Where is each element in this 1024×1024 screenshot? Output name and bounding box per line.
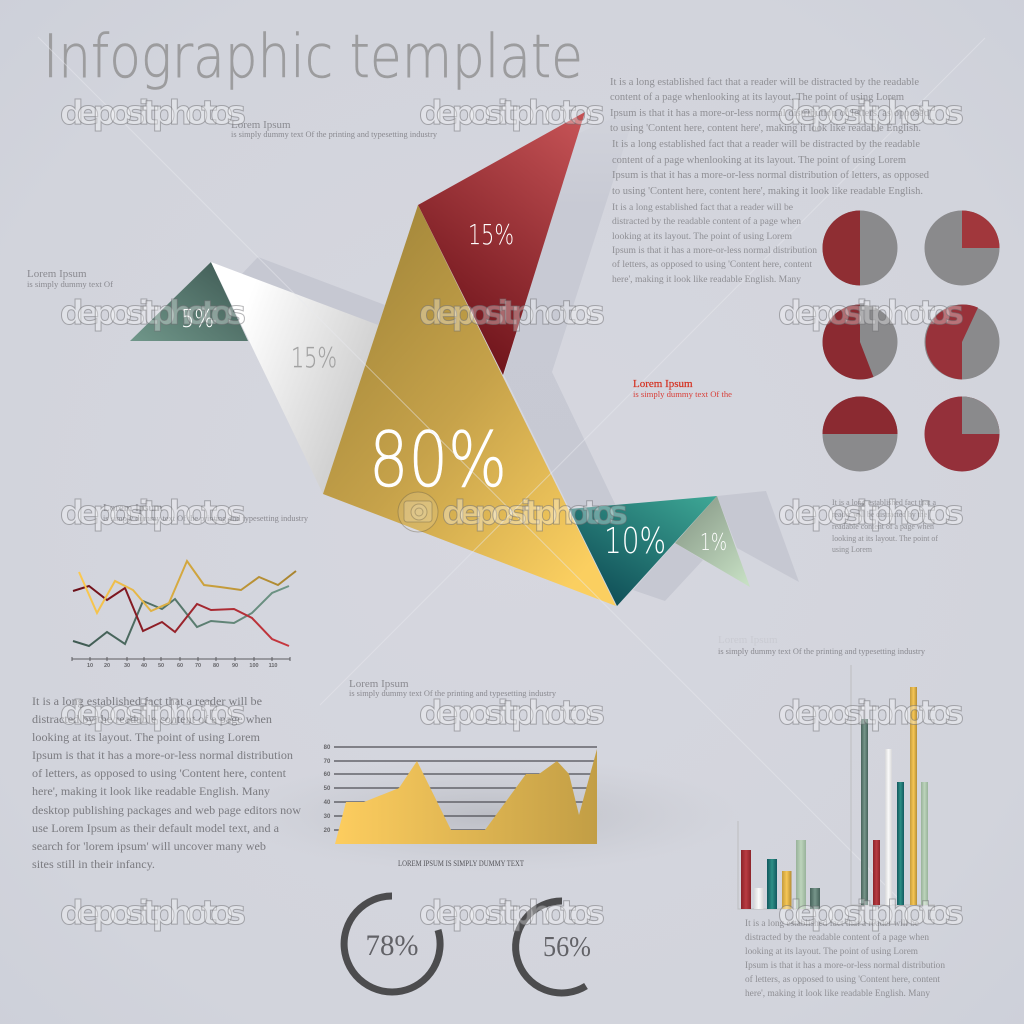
caption: line chart: [103, 502, 309, 523]
pie 6: [924, 396, 1000, 472]
text block: top right paragraphs: It is a long established fact that a reader will be distracted by the readable: [610, 77, 919, 88]
value: 5%: 5%: [181, 304, 214, 333]
caption: top centre: Lorem Ipsum: [231, 119, 291, 131]
axis: 80: [213, 663, 219, 669]
value: 80%: 80%: [369, 415, 507, 504]
axis: 60: [177, 663, 183, 669]
text block: lower right: of letters, as opposed to using 'Content here, content: [745, 974, 940, 985]
axis: 90: [232, 663, 238, 669]
text block: right of teal segment: looking at its layout. The point of: [832, 533, 938, 543]
watermarks: depositphotos: [778, 893, 964, 932]
watermarks: depositphotos: [419, 93, 605, 132]
caption: line chart: Lorem Ipsum: [103, 502, 163, 514]
caption: bar charts: Lorem Ipsum: [718, 634, 778, 646]
bar: light green: [796, 840, 806, 909]
text block: beside pies: It is a long established fact that a reader will be: [612, 202, 793, 213]
pie 1: [822, 210, 898, 286]
text block: right of teal segment: reader will be distracted by the: [832, 509, 927, 519]
caption: left: [27, 268, 113, 289]
caption: red: [633, 378, 732, 399]
caption: left: is simply dummy text Of: [27, 280, 113, 289]
bar: white: [754, 888, 764, 909]
text block: lower left: Ipsum is that it has a more-or-less normal distribution: [32, 750, 293, 762]
grid lines and scale: 70: [324, 759, 331, 765]
icon: watermark camera: [398, 492, 438, 532]
axis: 30: [124, 663, 130, 669]
axis: 100: [249, 663, 259, 669]
bar: red: [741, 850, 751, 909]
segment: dark green 5%: [130, 262, 248, 341]
chart caption: LOREM IPSUM IS SIMPLY DUMMY TEXT: [398, 858, 525, 868]
watermarks: depositphotos: [60, 693, 246, 732]
axis: 40: [141, 663, 147, 669]
watermarks: depositphotos: [778, 493, 964, 532]
axis: 70: [195, 663, 201, 669]
text block: lower right: here', making it look like readable English. Many: [745, 989, 930, 999]
grid lines and scale: 50: [324, 786, 331, 792]
bar: red: [873, 840, 880, 905]
segment: red 15%: [418, 112, 585, 375]
text block: lower right: distracted by the readable content of a page when: [745, 932, 929, 943]
caption: red: is simply dummy text Of the: [633, 390, 732, 399]
text block: lower left: looking at its layout. The point of using Lorem: [32, 732, 260, 744]
text block: right of teal segment: It is a long established fact that a: [832, 497, 936, 507]
value: 15% grey: 15%: [291, 341, 337, 374]
axis: 10: [87, 663, 93, 669]
value: 15% red: 15%: [468, 218, 514, 251]
grid lines and scale: 20: [324, 828, 331, 834]
caption: bar charts: [718, 634, 926, 656]
pie 4: [924, 304, 1000, 380]
text block: top right paragraphs: It is a long established fact that a reader will be distracted by the readable: [612, 139, 920, 150]
watermarks: depositphotos: [60, 293, 246, 332]
line: green: [73, 586, 289, 646]
gold area: [335, 749, 597, 844]
text block: top right paragraphs: to using 'Content here, content here', making it look like readable English.: [612, 186, 923, 197]
text block: right of teal segment: using Lorem: [832, 544, 872, 554]
ring: 78%: [344, 896, 440, 992]
grid lines and scale: 60: [324, 772, 331, 778]
bar: dark green: [810, 888, 820, 909]
large bar chart: [851, 665, 935, 905]
watermarks: depositphotos: [60, 93, 246, 132]
caption: top centre: is simply dummy text Of the printing and typesetting industry: [231, 130, 438, 139]
text block: lower left: distracted by the readable content of a page when: [32, 714, 272, 726]
watermarks: depositphotos: [778, 693, 964, 732]
watermarks: depositphotos: [60, 893, 246, 932]
segment: light green 1%: [675, 496, 750, 587]
bar: light green: [921, 782, 928, 905]
watermarks: depositphotos: [60, 493, 246, 532]
line: gold: [79, 561, 296, 613]
bar: white: [885, 749, 892, 905]
grid lines and scale: 80: [324, 745, 331, 751]
pie charts: [822, 210, 1000, 472]
small bar chart: [738, 821, 822, 909]
text block: beside pies: [612, 202, 817, 285]
text block: lower right: [745, 918, 945, 999]
segment: white 15%: [211, 262, 381, 494]
text block: right of teal segment: [832, 497, 938, 554]
text block: lower left: of letters, as opposed to using 'Content here, content: [32, 768, 287, 780]
bird shadow: [240, 107, 799, 601]
caption: left: Lorem Ipsum: [27, 268, 87, 280]
text block: top right paragraphs: [610, 77, 929, 197]
axis: [72, 657, 290, 669]
segment: teal 10%: [569, 496, 717, 606]
caption: area chart: is simply dummy text Of the printing and typesetting industry: [349, 689, 557, 698]
line chart: [72, 561, 296, 669]
text block: top right paragraphs: Ipsum is that it has a more-or-less normal distribution of letters, as opposed: [612, 170, 929, 181]
ring: 56%: 56%: [543, 932, 591, 963]
caption: area chart: [349, 678, 557, 698]
text block: beside pies: Ipsum is that it has a more-or-less normal distribution: [612, 246, 817, 256]
pie 2: [924, 210, 1000, 286]
bar: gold: [782, 871, 792, 909]
text block: lower left: It is a long established fact that a reader will be: [32, 696, 262, 708]
text block: beside pies: here', making it look like readable English. Many: [612, 275, 801, 285]
text block: beside pies: distracted by the readable content of a page when: [612, 216, 801, 227]
pie 3: [822, 304, 898, 380]
title: Infographic template: [43, 22, 583, 92]
ring: 78%: 78%: [366, 929, 418, 962]
watermarks: depositphotos: [442, 493, 628, 532]
axis: 50: [158, 663, 164, 669]
pie 5: [822, 396, 898, 472]
bar: dark green: [861, 719, 868, 905]
axis: 20: [104, 663, 110, 669]
text block: right of teal segment: readable content of a page when: [832, 521, 935, 531]
text block: lower left: [32, 696, 302, 871]
watermarks: depositphotos: [419, 893, 605, 932]
text block: top right paragraphs: to using 'Content here, content here', making it look like readable English.: [610, 123, 921, 134]
bar: teal: [767, 859, 777, 909]
origami bird chart: [130, 107, 799, 606]
text block: top right paragraphs: content of a page whenlooking at its layout. The point of using Lorem: [612, 155, 906, 166]
text block: lower left: search for 'lorem ipsum' will uncover many web: [32, 841, 266, 853]
value: 10%: 10%: [604, 521, 666, 562]
watermarks: depositphotos: [419, 293, 605, 332]
text block: lower right: looking at its layout. The point of using Lorem: [745, 946, 919, 957]
axis: 110: [269, 663, 277, 669]
text block: beside pies: of letters, as opposed to using 'Content here, content: [612, 259, 812, 270]
text block: lower left: sites still in their infancy.: [32, 859, 155, 871]
text block: lower left: here', making it look like readable English. Many: [32, 786, 270, 798]
line: red: [73, 586, 289, 646]
grid lines and scale: 40: [324, 800, 331, 806]
watermarks: [60, 93, 964, 932]
text block: lower right: Ipsum is that it has a more-or-less normal distribution: [745, 961, 945, 971]
text block: lower left: use Lorem Ipsum as their default model text, and a: [32, 823, 279, 835]
caption: red: Lorem Ipsum: [633, 378, 693, 390]
caption: top centre: [231, 119, 438, 139]
segment: gold 80%: [323, 205, 616, 606]
bar: teal: [897, 782, 904, 905]
caption: bar charts: is simply dummy text Of the printing and typesetting industry: [718, 647, 926, 656]
caption: line chart: is simply dummy text Of the printing and typesetting industry: [103, 514, 309, 523]
watermarks: depositphotos: [419, 693, 605, 732]
area chart: [324, 745, 597, 868]
caption: area chart: Lorem Ipsum: [349, 678, 409, 690]
watermarks: depositphotos: [778, 93, 964, 132]
text block: lower right: It is a long established fact that a reader will be: [745, 918, 919, 929]
text block: beside pies: looking at its layout. The point of using Lorem: [612, 231, 793, 242]
grid lines and scale: 30: [324, 814, 331, 820]
grid lines and scale: [324, 745, 597, 834]
watermarks: depositphotos: [778, 293, 964, 332]
text block: lower left: desktop publishing packages and web page editors now: [32, 805, 302, 817]
value: 1%: 1%: [700, 530, 727, 556]
bar: gold: [910, 687, 917, 905]
ring: 56%: [516, 901, 591, 993]
text block: top right paragraphs: Ipsum is that it has a more-or-less normal distribution of letters, as opposed: [610, 108, 929, 119]
text block: top right paragraphs: content of a page whenlooking at its layout. The point of using Lorem: [610, 92, 904, 103]
